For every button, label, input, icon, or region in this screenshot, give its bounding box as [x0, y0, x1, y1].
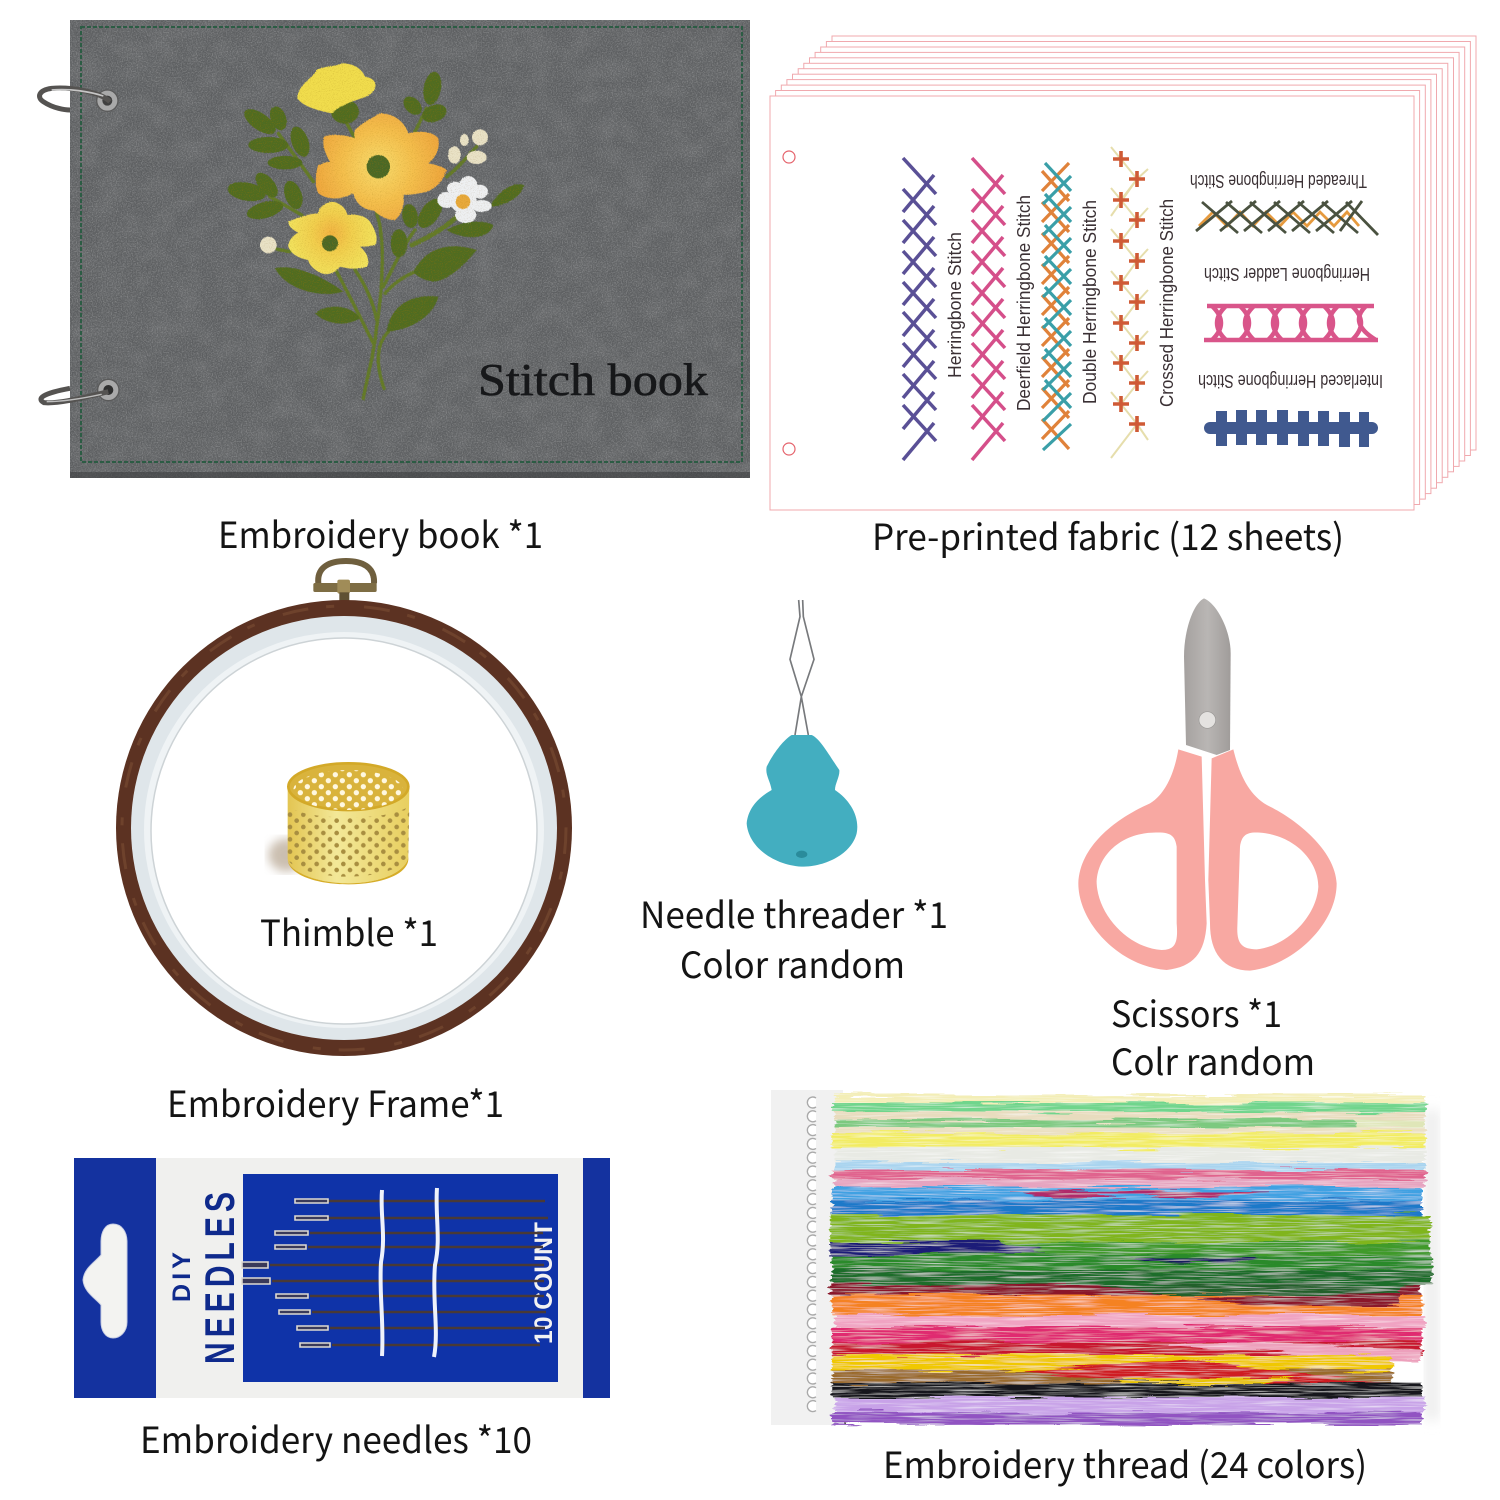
book cover: [70, 20, 750, 478]
stitch label: threaded (upside down): Threaded Herringbone Stitch: [1190, 171, 1367, 191]
stitch: herringbone pink: [972, 158, 1005, 460]
package text: 10 count: 10 COUNT: [530, 1222, 558, 1344]
label: colr random: Colr random: [1111, 1034, 1315, 1086]
thread card: [771, 1090, 845, 1425]
icon: threader wire: [790, 600, 814, 735]
threader hole: [796, 851, 807, 858]
label: embroidery frame: Embroidery Frame*1: [167, 1076, 504, 1128]
label: embroidery thread: Embroidery thread (24 colors): [883, 1437, 1367, 1489]
icon: scissor blades: [1184, 598, 1231, 755]
label: embroidery needles: Embroidery needles *10: [140, 1412, 532, 1464]
label: thimble: Thimble *1: [260, 905, 438, 957]
package text: needles: NEEDLES: [196, 1192, 243, 1364]
thread bundles (24 colors): [830, 1095, 1432, 1425]
label: embroidery book: Embroidery book *1: [218, 507, 543, 559]
icon: scissor handles: [1078, 749, 1337, 971]
hang hole: [83, 1224, 127, 1338]
stitch: double herringbone: [1042, 163, 1071, 450]
label: pre-printed fabric: Pre-printed fabric (12 sheets): [872, 509, 1344, 561]
icon: embroidered flower bouquet: [226, 63, 524, 398]
thread shadow: [1425, 1110, 1439, 1420]
stitch label: herringbone: Herringbone Stitch: [945, 232, 965, 378]
panel: scissors: [1078, 598, 1337, 971]
icon: thimble: [268, 763, 409, 884]
stitch: crossed herringbone: [1111, 147, 1148, 458]
punched holes: [783, 151, 795, 455]
icon: threader body: [747, 735, 857, 867]
icon: frame clasp: [313, 561, 377, 601]
panel: embroidery frame: [116, 561, 572, 1056]
stitch label: deerfield: Deerfield Herringbone Stitch: [1014, 195, 1034, 411]
icon: needles: [242, 1188, 548, 1357]
panel: needle threader: [747, 600, 857, 867]
package text: DIY: DIY: [168, 1252, 196, 1302]
stitch: threaded herringbone: [1196, 201, 1378, 235]
stacked fabric sheets: [770, 36, 1476, 510]
panel: embroidery thread: [771, 1090, 1439, 1425]
icon: binder rings: [40, 88, 119, 403]
stitch label: ladder (upside down): Herringbone Ladder Stitch: [1204, 264, 1370, 284]
label: color random: Color random: [680, 937, 905, 989]
label: scissors: Scissors *1: [1111, 986, 1282, 1038]
stitch label: crossed: Crossed Herringbone Stitch: [1157, 199, 1177, 407]
stitch: herringbone ladder: [1204, 306, 1378, 340]
package card: [74, 1158, 610, 1398]
label: needle threader: Needle threader *1: [640, 887, 948, 939]
stitch: herringbone: [903, 158, 936, 460]
stitch: interlaced herringbone: [1204, 410, 1378, 447]
icon: wooden hoop: [116, 600, 572, 1056]
book title: Stitch book: [478, 354, 708, 405]
stitch label: double: Double Herringbone Stitch: [1080, 200, 1100, 404]
panel: pre-printed fabric: [770, 36, 1476, 510]
icon: scissor pivot: [1199, 712, 1216, 728]
panel: embroidery needles package: [74, 1158, 610, 1398]
stitch label: interlaced (upside down): Interlaced Herringbone Stitch: [1198, 371, 1383, 391]
panel: embroidery book: [40, 20, 750, 478]
